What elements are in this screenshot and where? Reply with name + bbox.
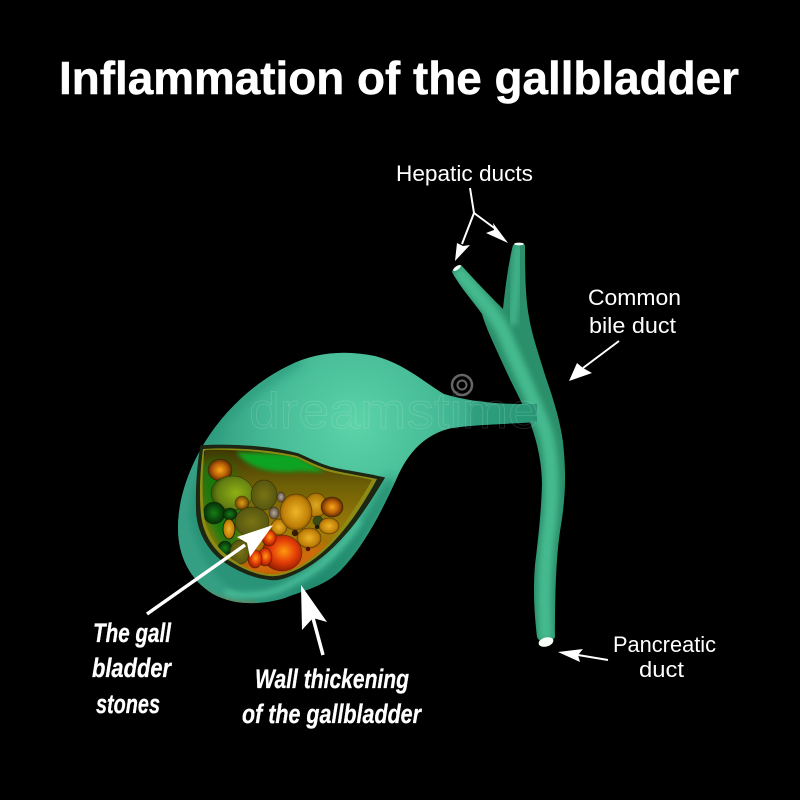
gallbladder body [170,353,537,615]
label: common bile duct [588,285,681,338]
arrows: hepatic ducts [455,188,508,261]
label: common bile duct: bile duct [589,313,676,338]
label: wall thickening [242,664,422,729]
title: Inflammation of the gallbladder [59,52,739,104]
duct openings [452,243,554,648]
stones [203,459,343,571]
label: wall thickening: of the gallbladder [242,699,422,729]
arrow: gallbladder stones [147,525,273,614]
label: gallbladder stones: stones [96,689,160,719]
gallbladder organ [170,243,565,648]
label: pancreatic duct: duct [639,657,684,682]
label: pancreatic duct [613,632,716,682]
arrow: pancreatic duct [558,649,608,662]
bile duct tree [452,244,565,643]
label: gallbladder stones [92,618,172,719]
label: gallbladder stones: bladder [92,653,172,683]
label: pancreatic duct: Pancreatic [613,632,716,657]
label: gallbladder stones: The gall [93,618,171,648]
label: hepatic ducts: Hepatic ducts [396,161,533,186]
arrow: common bile duct [569,341,619,381]
watermark: dreamstime [249,383,539,439]
arrow: wall thickening [301,585,327,655]
cross-section cavity with stones [195,445,385,580]
label: wall thickening: Wall thickening [255,664,409,694]
label: common bile duct: Common [588,285,681,310]
